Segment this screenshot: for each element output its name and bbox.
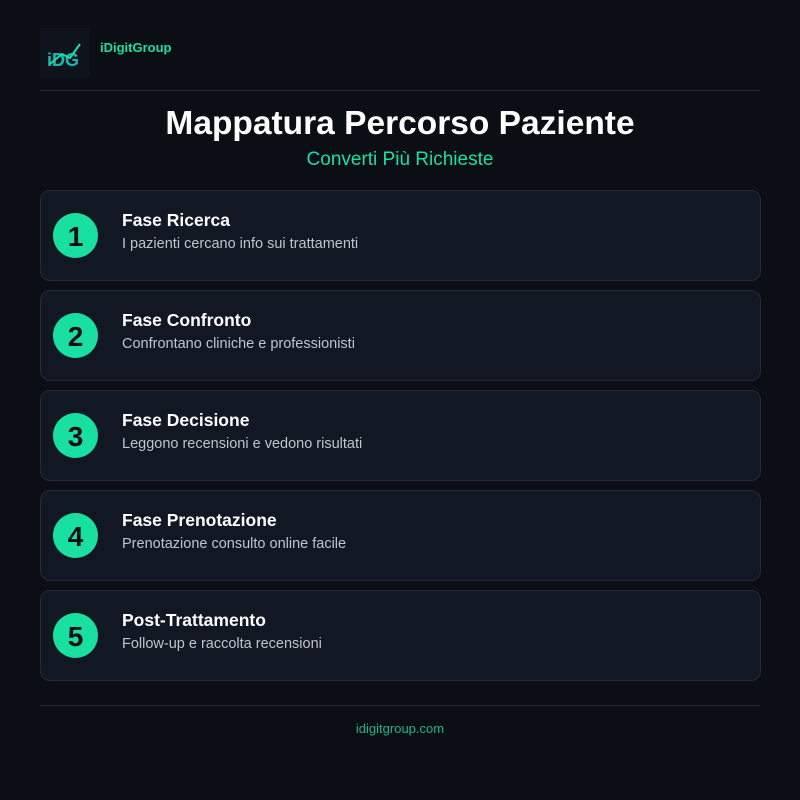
footer: idigitgroup.com — [356, 721, 444, 736]
logo — [40, 28, 90, 78]
card 3 — [40, 390, 761, 481]
card 4: 4 — [68, 521, 83, 552]
card 4: Prenotazione consulto online facile — [122, 536, 346, 552]
card 3: 3 — [68, 421, 83, 452]
card 1: Fase Ricerca — [122, 210, 230, 230]
card 5: Post-Trattamento — [122, 610, 266, 630]
card 2 — [40, 290, 761, 381]
card 5: Follow-up e raccolta recensioni — [122, 636, 322, 652]
card 4 — [40, 490, 761, 581]
card 2: Fase Confronto — [122, 310, 251, 330]
logo: iDG — [47, 50, 79, 70]
card 3: Fase Decisione — [122, 410, 249, 430]
card 5 — [40, 590, 761, 681]
card 5: 5 — [68, 621, 83, 652]
card 2: 2 — [68, 321, 83, 352]
brand name: iDigitGroup — [100, 40, 172, 55]
subtitle: Converti Più Richieste — [307, 149, 493, 170]
card 4: Fase Prenotazione — [122, 510, 277, 530]
card 3: Leggono recensioni e vedono risultati — [122, 436, 362, 452]
title: Mappatura Percorso Paziente — [165, 105, 635, 142]
card 1 — [40, 190, 761, 281]
card 1: I pazienti cercano info sui trattamenti — [122, 236, 358, 252]
card 1: 1 — [68, 221, 83, 252]
card 2: Confrontano cliniche e professionisti — [122, 336, 355, 352]
